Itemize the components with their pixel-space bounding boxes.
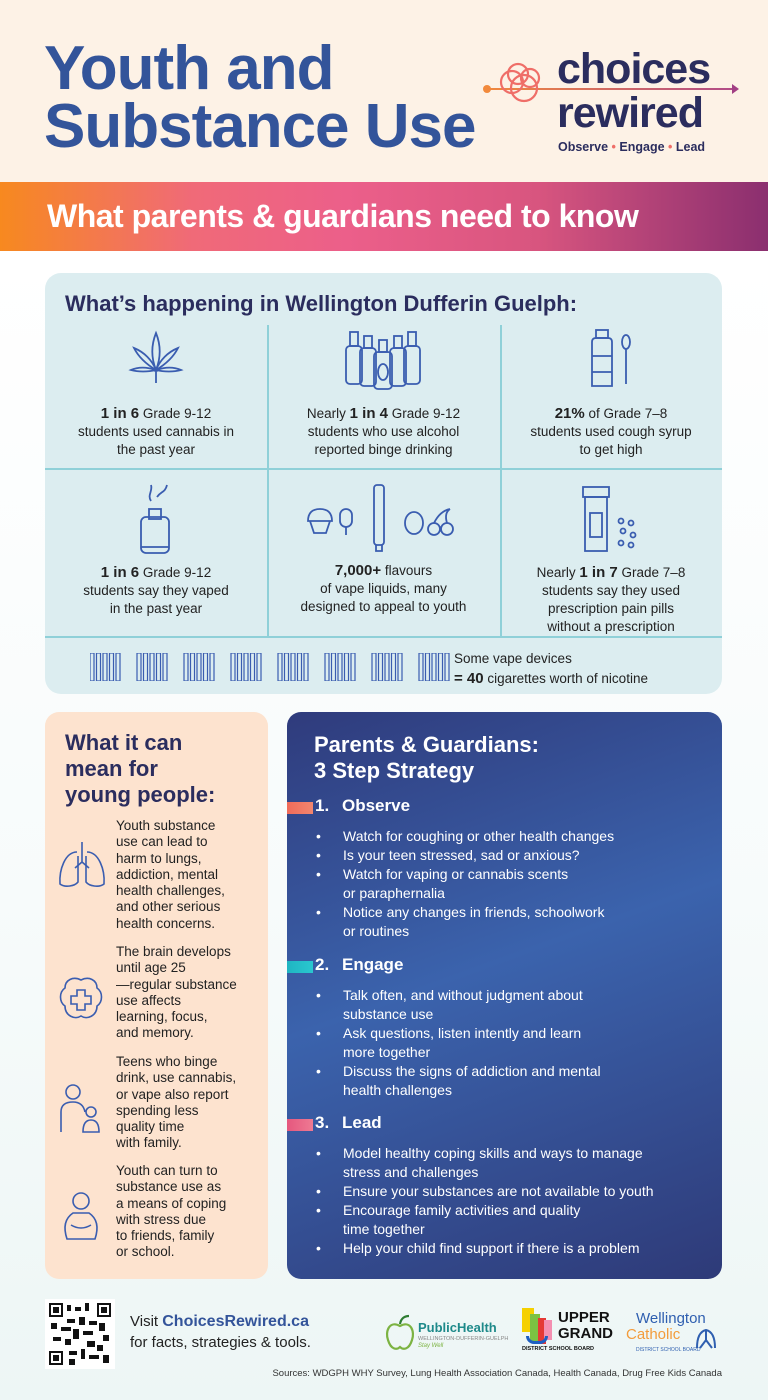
sources: Sources: WDGPH WHY Survey, Lung Health Association Canada, Health Canada, Drug Free Kids Canada — [272, 1368, 722, 1379]
item: lungs: Youth substance — [116, 818, 215, 833]
stat: cannabis: students used cannabis in — [78, 424, 234, 439]
stat: alcohol: Nearly 1 in 4 Grade 9-12 — [307, 405, 460, 422]
stat: vaping: 1 in 6 Grade 9-12 — [101, 564, 211, 581]
stat: cannabis: 1 in 6 Grade 9-12 — [101, 405, 211, 422]
stat: cannabis — [78, 330, 234, 457]
panel: 3 step strategy: stress and challenges — [343, 1164, 478, 1180]
stat: cough syrup: students used cough syrup — [530, 424, 692, 439]
logo: public health — [386, 1314, 508, 1350]
logo: choices rewired: choices — [557, 45, 710, 93]
panel: 3 step strategy: more together — [343, 1044, 430, 1060]
heading: strategy — [314, 732, 539, 783]
logo: upper grand: UPPER — [558, 1309, 610, 1326]
stat: flavours: of vape liquids, many — [320, 581, 447, 596]
panel: 3 step strategy: Observe — [342, 796, 410, 815]
stat: alcohol: students who use alcohol — [308, 424, 459, 439]
step: lead — [287, 1113, 654, 1256]
stat: prescription pills: Nearly 1 in 7 Grade 7–8 — [537, 564, 685, 581]
stat: vaping: students say they vaped — [83, 583, 229, 598]
title: Youth and — [44, 34, 333, 103]
item: family: spending less — [116, 1103, 199, 1118]
panel: 3 step strategy: Lead — [342, 1113, 382, 1132]
panel: stats — [45, 273, 722, 694]
stat: cough syrup: to get high — [579, 442, 643, 457]
item: family: or vape also report — [116, 1087, 229, 1102]
logo: upper grand: DISTRICT SCHOOL BOARD — [522, 1346, 594, 1352]
logo: wellington catholic: DISTRICT SCHOOL BOARD — [636, 1347, 700, 1353]
panel: 3 step strategy: Talk often, and without judgment about — [343, 987, 583, 1003]
panel: what it can mean — [45, 712, 268, 1279]
panel: 3 step strategy: Is your teen stressed, sad or anxious? — [343, 847, 580, 863]
text: visit: for facts, strategies & tools. — [130, 1334, 311, 1351]
item: brain — [60, 944, 237, 1040]
stat: prescription pills: students say they used — [542, 583, 680, 598]
panel: 3 step strategy: Notice any changes in friends, schoolwork — [343, 904, 604, 920]
panel: 3 step strategy: Watch for coughing or other health changes — [343, 828, 614, 844]
item: stress: substance use as — [116, 1179, 221, 1194]
logo: wellington catholic: Wellington — [636, 1310, 706, 1327]
item: brain: The brain develops — [116, 944, 231, 959]
item: lungs: health concerns. — [116, 916, 215, 931]
heading: what it can mean: What it can — [65, 730, 182, 755]
stat: prescription pills: without a prescription — [547, 619, 675, 634]
stat: cough syrup — [530, 329, 692, 457]
item: lungs — [59, 818, 225, 931]
heading: what it can mean: mean for — [65, 756, 158, 781]
stat: cannabis: the past year — [117, 442, 195, 457]
item: family: with family. — [116, 1135, 182, 1150]
stat: flavours: designed to appeal to youth — [301, 599, 466, 614]
item: lungs: and other serious — [116, 899, 220, 914]
logo: public health: PublicHealth — [418, 1320, 497, 1335]
item: stress — [64, 1163, 226, 1259]
panel: 3 step strategy: substance use — [343, 1006, 433, 1022]
item: stress: or school. — [116, 1244, 175, 1259]
logo: public health: WELLINGTON-DUFFERIN-GUELPH — [418, 1336, 508, 1342]
title: Substance Use — [44, 92, 476, 161]
panel: 3 step strategy: Watch for vaping or cannabis scents — [343, 866, 568, 882]
item: lungs: addiction, mental — [116, 867, 218, 882]
item: stress: Youth can turn to — [116, 1163, 218, 1178]
logo: upper grand — [522, 1308, 613, 1352]
panel: 3 step strategy: Ensure your substances are not available to youth — [343, 1183, 654, 1199]
banner: What parents & guardians need to know — [47, 198, 638, 234]
heading: what it can mean: young people: — [65, 782, 215, 807]
item: stress: with stress due — [116, 1212, 206, 1227]
step: engage — [287, 955, 601, 1098]
item: stress: a means of coping — [116, 1196, 226, 1211]
item: brain: —regular substance — [116, 977, 237, 992]
stat: prescription pills: prescription pain pills — [548, 601, 674, 616]
stat: vaping: in the past year — [110, 601, 202, 616]
text: visit: Visit ChoicesRewired.ca — [130, 1313, 309, 1330]
stat: alcohol: reported binge drinking — [314, 442, 453, 457]
logo: choices rewired — [483, 45, 739, 154]
icon: cigarette packs — [90, 653, 450, 681]
item: brain: until age 25 — [116, 960, 186, 975]
item: family — [60, 1054, 236, 1150]
panel: 3 step strategy: Encourage family activities and quality — [343, 1202, 580, 1218]
item: lungs: health challenges, — [116, 883, 225, 898]
panel: 3 step strategy: time together — [343, 1221, 425, 1237]
stat: prescription pills — [537, 486, 685, 634]
logo: choices rewired: Observe • Engage • Lead — [558, 140, 705, 154]
QR code — [45, 1299, 115, 1369]
stat: alcohol — [307, 331, 460, 457]
item: family: drink, use cannabis, — [116, 1070, 236, 1085]
panel: 3 step strategy: Engage — [342, 955, 403, 974]
text: vape nicotine: = 40 cigarettes worth of nicotine — [454, 670, 648, 687]
text: visit — [130, 1313, 311, 1351]
heading: strategy: 3 Step Strategy — [314, 758, 474, 783]
heading: strategy: Parents & Guardians: — [314, 732, 539, 757]
item: stress: to friends, family — [116, 1228, 214, 1243]
panel: 3 step strategy: 2. — [315, 955, 329, 974]
banner — [0, 182, 768, 251]
stat: flavours — [301, 484, 466, 614]
logo: public health: Stay Well — [418, 1343, 443, 1349]
step: observe — [287, 796, 614, 939]
item: brain: and memory. — [116, 1025, 194, 1040]
item: lungs: use can lead to — [116, 834, 208, 849]
logo: choices rewired: rewired — [557, 89, 703, 137]
panel: 3 step strategy: Help your child find support if there is a problem — [343, 1240, 639, 1256]
item: brain: use affects — [116, 993, 181, 1008]
panel: 3 step strategy: Model healthy coping skills and ways to manage — [343, 1145, 643, 1161]
text: vape nicotine: Some vape devices — [454, 651, 572, 666]
logo: upper grand: GRAND — [558, 1325, 613, 1342]
panel: 3 step strategy: Discuss the signs of addiction and mental — [343, 1063, 601, 1079]
stat: cough syrup: 21% of Grade 7–8 — [555, 405, 667, 422]
panel: 3 step strategy: or paraphernalia — [343, 885, 445, 901]
panel: 3 step strategy: or routines — [343, 923, 409, 939]
text: vape nicotine — [454, 651, 648, 687]
logo: wellington catholic: Catholic — [626, 1326, 680, 1343]
heading: what it can mean — [65, 730, 215, 807]
item: family: Teens who binge — [116, 1054, 217, 1069]
stat: flavours: 7,000+ flavours — [335, 562, 432, 579]
panel: 3 step strategy — [287, 712, 722, 1279]
logo: wellington catholic — [626, 1310, 716, 1353]
stat: vaping — [83, 484, 229, 616]
panel: 3 step strategy: Ask questions, listen intently and learn — [343, 1025, 581, 1041]
item: brain: learning, focus, — [116, 1009, 208, 1024]
panel: 3 step strategy: health challenges — [343, 1082, 452, 1098]
title — [44, 34, 476, 161]
panel: 3 step strategy: 1. — [315, 796, 329, 815]
item: family: quality time — [116, 1119, 184, 1134]
heading: stats: What’s happening in Wellington Dufferin Guelph: — [65, 291, 577, 316]
panel: 3 step strategy: 3. — [315, 1113, 329, 1132]
item: lungs: harm to lungs, — [116, 851, 202, 866]
